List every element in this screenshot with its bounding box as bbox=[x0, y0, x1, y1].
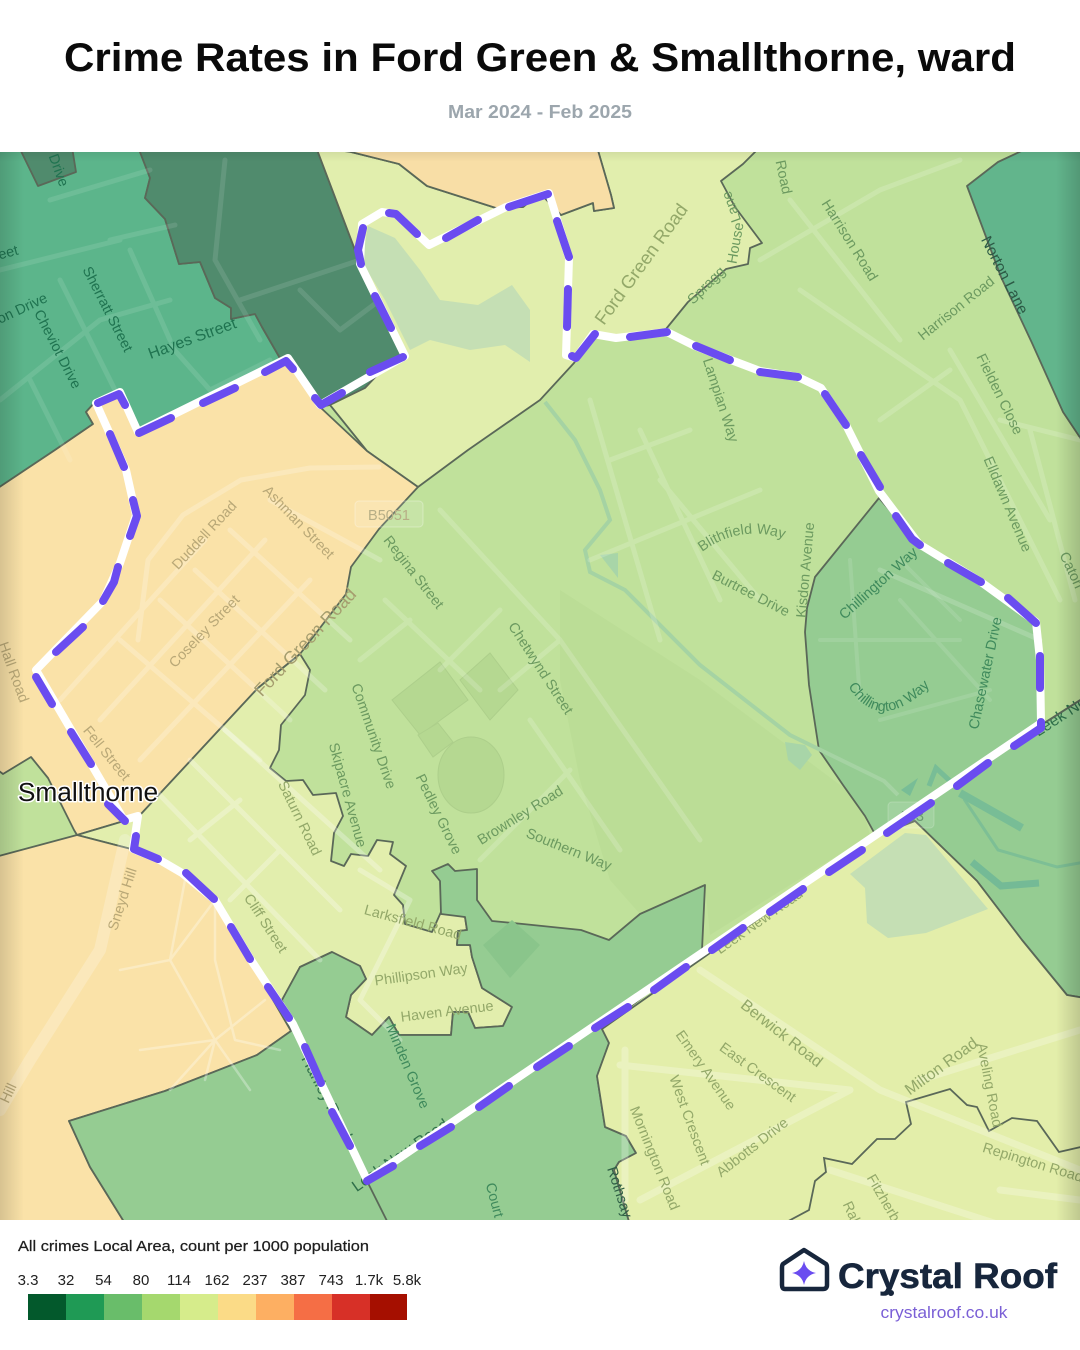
area: north-west green bbox=[0, 147, 288, 490]
roads: pale centre-west bbox=[155, 730, 410, 1040]
website link: crystalroof.co.uk bbox=[880, 1304, 1008, 1322]
road labels: orange areas bbox=[0, 483, 360, 1106]
legend tick labels: 3.3 bbox=[18, 1272, 38, 1289]
area: central darker green bbox=[560, 590, 870, 935]
legend tick labels: 237 bbox=[242, 1272, 268, 1289]
roads: north-west dark bbox=[215, 160, 380, 340]
road labels: north-west green: Sherratt Street bbox=[79, 264, 135, 355]
area: north orange bbox=[351, 147, 614, 215]
wordmark: Crystal Roof bbox=[838, 1257, 1057, 1296]
road labels: green areas: Lane bbox=[719, 189, 745, 224]
area: Chillington mid green bbox=[805, 498, 1080, 998]
boundary: purple dashes bbox=[36, 194, 1041, 1181]
road labels: orange areas: Ashman Street bbox=[259, 483, 337, 563]
lake: south-east bbox=[850, 833, 988, 938]
roads: Chillington bbox=[820, 560, 990, 720]
area: north pale green bbox=[316, 147, 762, 487]
water and playing fields bbox=[362, 226, 1080, 978]
road labels: orange areas: Duddell Road bbox=[169, 498, 240, 573]
road labels: pale areas: West Crescent bbox=[665, 1073, 713, 1167]
logo: Crystal Roof bbox=[782, 1250, 1057, 1322]
road labels: north-west green: Drive bbox=[45, 152, 71, 189]
road labels: pale areas: Ford Green Road bbox=[590, 200, 692, 328]
road labels: mid green areas: Chillington Way bbox=[850, 680, 928, 714]
road labels: mid green areas: Hanley Road bbox=[297, 1052, 355, 1143]
area: west orange bbox=[0, 358, 418, 835]
road labels: mid green areas: Minden Grove bbox=[382, 1022, 432, 1111]
legend tick labels: 32 bbox=[58, 1272, 74, 1289]
road labels: green areas: Harrison Road bbox=[818, 197, 880, 284]
road labels: green areas: Spragg bbox=[685, 264, 729, 308]
road labels: green areas: Community Drive bbox=[347, 682, 399, 791]
road labels: green areas: Chetwynd Street bbox=[504, 620, 576, 718]
area: centre-west pale green bbox=[77, 654, 512, 1035]
playing fields bbox=[392, 653, 518, 813]
road labels: green areas: Regina Street bbox=[380, 533, 447, 612]
road network bbox=[0, 160, 1080, 1225]
road labels: north-west green bbox=[0, 152, 1031, 392]
road labels: green areas: Fielden Close bbox=[973, 351, 1026, 438]
roads: central bbox=[360, 400, 760, 860]
shield: B5051: B5051 bbox=[368, 508, 410, 524]
road shields bbox=[355, 501, 934, 828]
pond bbox=[785, 742, 812, 770]
road labels: pale areas: Fitzherbert bbox=[863, 1172, 911, 1239]
roads: north-west bbox=[0, 170, 270, 460]
road labels: mid green areas: Chasewater Drive bbox=[966, 616, 1006, 731]
road labels: pale areas: Milton Road bbox=[902, 1035, 981, 1099]
road labels: pale areas: Aveling Road bbox=[973, 1042, 1005, 1129]
road labels: mid green areas: Chillington Way bbox=[836, 544, 922, 623]
road labels: mid green areas: Court bbox=[482, 1181, 506, 1219]
ward boundary bbox=[36, 193, 1041, 1181]
road labels: green areas: Burtree Drive bbox=[709, 568, 792, 620]
legend colour bar bbox=[28, 1294, 407, 1320]
road labels: green areas: Lampian Way bbox=[699, 356, 741, 445]
roads: west orange bbox=[60, 467, 380, 760]
legend bbox=[18, 1238, 422, 1320]
roads: south-east bbox=[620, 970, 1080, 1225]
road labels: green areas: Kisdon Avenue bbox=[794, 522, 818, 618]
road labels: green areas: House bbox=[725, 221, 748, 265]
legend tick labels: 743 bbox=[318, 1272, 344, 1289]
legend tick labels: 54 bbox=[95, 1272, 112, 1289]
road labels: pale areas: East Crescent bbox=[716, 1040, 799, 1106]
road labels: orange areas: Sneyd Hill bbox=[105, 866, 141, 933]
legend tick labels: 1.7k bbox=[355, 1272, 384, 1289]
legend tick labels: 80 bbox=[133, 1272, 149, 1289]
road labels: pale areas: Berwick Road bbox=[737, 997, 825, 1071]
legend tick labels: 162 bbox=[204, 1272, 230, 1289]
legend tick labels: 114 bbox=[167, 1272, 191, 1289]
legend tick labels: 387 bbox=[280, 1272, 306, 1289]
road labels: pale areas: Emery Avenue bbox=[672, 1028, 738, 1113]
road labels: mid green areas bbox=[264, 516, 1080, 1218]
area: north-east teal bbox=[967, 147, 1080, 445]
area: corner dark green bbox=[20, 152, 77, 187]
road labels: pale areas: Saturn Road bbox=[274, 779, 324, 858]
road labels: green areas: Brownley Road bbox=[475, 783, 566, 849]
subtitle: date range: Mar 2024 - Feb 2025 bbox=[448, 101, 632, 122]
road labels: pale areas: Larksfield Road bbox=[362, 902, 463, 944]
area: south-west orange bbox=[0, 835, 291, 1225]
road labels: green areas: Pedley Grove bbox=[412, 772, 464, 857]
boundary: south-east zigzag bbox=[781, 1089, 1080, 1225]
boundary: white casing bbox=[36, 193, 1041, 1180]
road labels: green areas: Blithfield Way bbox=[698, 523, 786, 552]
area: south-east pale green bbox=[597, 821, 1080, 1225]
wordmark key detail bbox=[888, 1290, 894, 1296]
road labels: pale areas: Haven Avenue bbox=[400, 998, 494, 1026]
road labels: pale areas: Cliff Street bbox=[240, 891, 290, 956]
edge shading bbox=[0, 152, 1080, 1220]
river bbox=[545, 402, 1080, 886]
road labels: north-west green: Norton Lane bbox=[977, 234, 1031, 317]
road labels: pale areas: Leek New Road bbox=[713, 886, 806, 958]
title: Crime Rates in Ford Green & Smallthorne, ward bbox=[64, 36, 1016, 80]
shield: B5051 bbox=[355, 501, 423, 527]
road labels: green areas: Road bbox=[772, 159, 794, 196]
road labels: green areas: Elldawn Avenue bbox=[980, 454, 1034, 555]
east boundary stub bbox=[1046, 697, 1080, 722]
icon: house with star bbox=[782, 1250, 827, 1289]
shield: A53: A53 bbox=[898, 809, 924, 825]
road labels: pale areas: Phillipson Way bbox=[374, 960, 470, 989]
road labels: north-west green: Cheviot Drive bbox=[30, 307, 84, 392]
roads: south-west park bbox=[120, 880, 280, 1090]
road labels: green areas: Skipacre Avenue bbox=[325, 741, 369, 849]
shield: A53 bbox=[888, 802, 934, 828]
roads: north-east bbox=[760, 160, 1080, 640]
road labels: pale areas: Mornington Road bbox=[626, 1104, 682, 1213]
road labels: pale areas: Abbotts Drive bbox=[714, 1115, 792, 1181]
field: south green bbox=[483, 920, 540, 978]
road labels: pale areas: Ralph bbox=[839, 1199, 869, 1240]
road labels: mid green areas: Leek New Road bbox=[349, 1116, 452, 1196]
legend tick labels bbox=[18, 1272, 422, 1289]
area: south mid green bbox=[69, 864, 705, 1225]
road labels: orange areas: Coseley Street bbox=[166, 592, 243, 671]
road labels: green areas bbox=[311, 160, 1080, 912]
legend title: All crimes Local Area, count per 1000 population bbox=[18, 1238, 369, 1255]
road labels: green areas: Southern Way bbox=[524, 826, 614, 875]
road labels: pale areas bbox=[240, 200, 1080, 1240]
legend tick labels: 5.8k bbox=[393, 1272, 422, 1289]
area: north-west dark green bbox=[138, 147, 406, 407]
lake: north bbox=[362, 226, 530, 362]
road labels: green areas: Harrison Road bbox=[915, 274, 998, 344]
road labels: north-west green: Hayes Street bbox=[146, 315, 239, 363]
place label: Smallthorne: Smallthorne bbox=[18, 777, 158, 807]
road labels: orange areas: Ford Green Road bbox=[250, 584, 360, 700]
road labels: mid green areas: Rothsay bbox=[603, 1165, 635, 1221]
road labels: orange areas: Fell Street bbox=[79, 723, 133, 784]
boundary: south line bbox=[368, 1184, 388, 1220]
